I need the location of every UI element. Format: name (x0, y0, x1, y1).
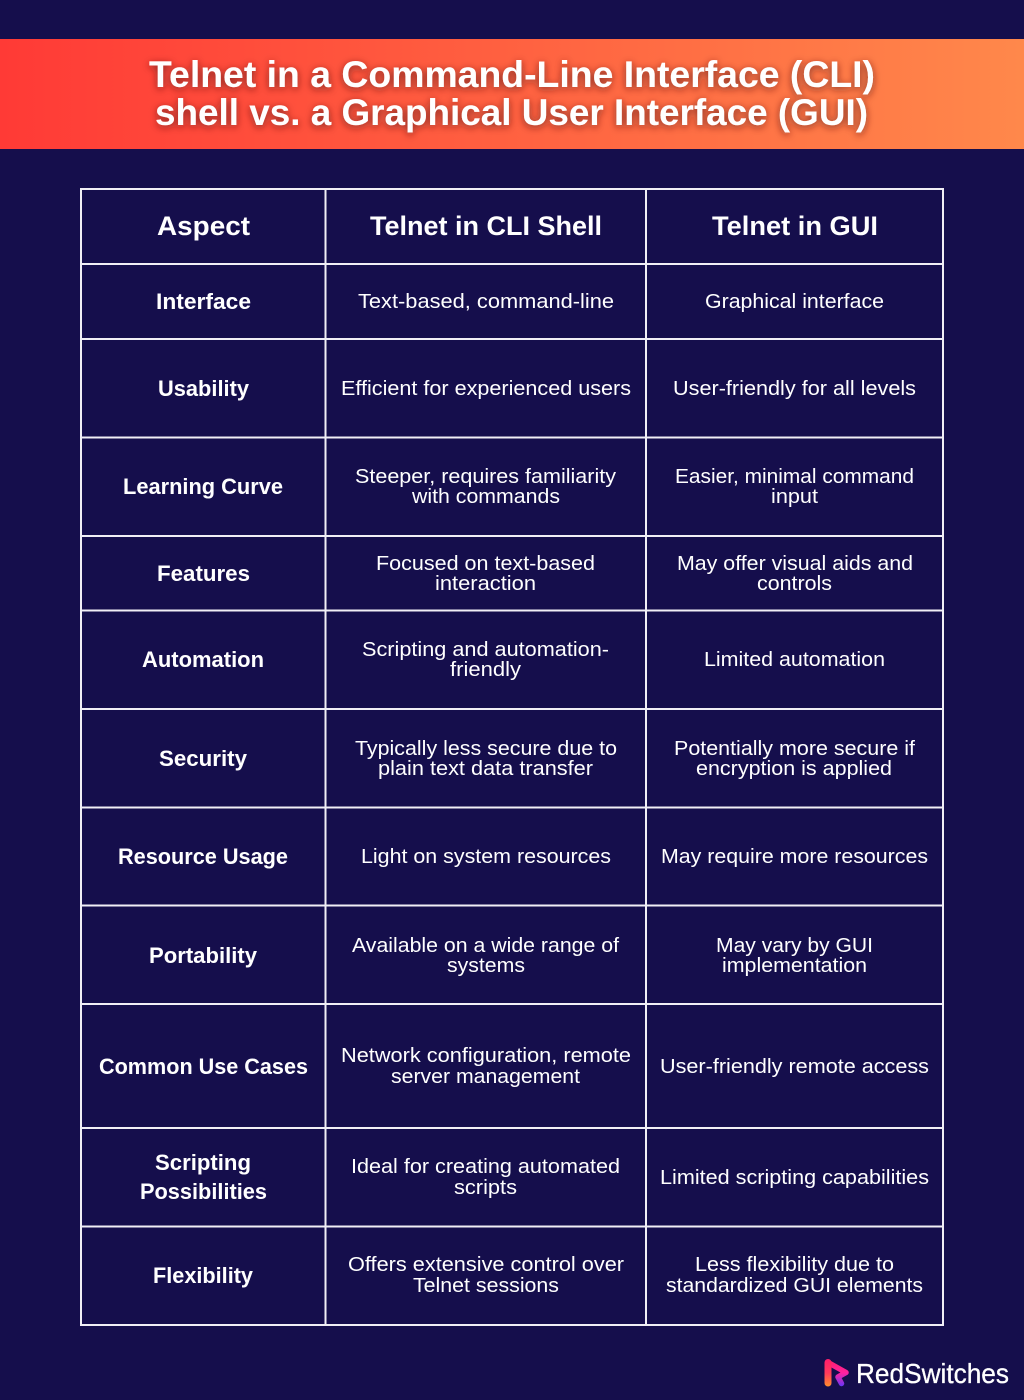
table header row (157, 211, 878, 241)
row: features: Focused on text-based (376, 552, 595, 575)
row: portability: May vary by GUI (716, 934, 873, 957)
row: features: Features (157, 561, 250, 586)
row: interface: Interface (156, 289, 251, 314)
row: automation: Scripting and automation- (362, 638, 609, 661)
row: usability: Efficient for experienced users (341, 377, 631, 400)
comparison table (81, 189, 943, 1325)
table header row: Aspect (157, 211, 250, 241)
row: common use cases: User-friendly remote access (660, 1055, 929, 1078)
row: resource usage: Resource Usage (118, 844, 288, 869)
row: features: interaction (435, 572, 536, 595)
row: security: encryption is applied (696, 757, 892, 780)
row: learning curve (123, 465, 914, 508)
row: usability (158, 376, 916, 401)
logo wordmark: RedSwitches (856, 1358, 1009, 1389)
table grid (81, 189, 943, 1325)
row: common use cases: Network configuration, remote (341, 1044, 631, 1067)
row: automation (142, 638, 885, 681)
row: automation: Limited automation (704, 648, 885, 671)
row: flexibility: Less flexibility due to (695, 1253, 894, 1276)
row: security: Security (159, 746, 248, 771)
row: features: May offer visual aids and (677, 552, 913, 575)
header banner (0, 39, 1024, 149)
row: common use cases: Common Use Cases (99, 1054, 308, 1079)
row: resource usage: Light on system resources (361, 845, 611, 868)
row: common use cases: server management (391, 1065, 580, 1088)
row: automation: Automation (142, 647, 264, 672)
row: learning curve: Steeper, requires familiarity (355, 465, 617, 488)
row: portability: Available on a wide range of (352, 934, 619, 957)
row: portability: Portability (149, 943, 258, 968)
title (149, 54, 875, 133)
row: scripting possibilities (140, 1150, 929, 1204)
row: flexibility: Telnet sessions (413, 1274, 559, 1297)
row: learning curve: Learning Curve (123, 474, 283, 499)
title: shell vs. a Graphical User Interface (GUI) (155, 92, 868, 133)
row: features (157, 552, 913, 595)
row: scripting possibilities: Ideal for creating automated (351, 1155, 620, 1178)
row: interface: Text-based, command-line (358, 290, 614, 313)
title: Telnet in a Command-Line Interface (CLI) (149, 54, 875, 95)
row: scripting possibilities: Scripting (155, 1150, 251, 1175)
row: common use cases (99, 1044, 929, 1088)
logo: RedSwitches (828, 1358, 1009, 1389)
row: features: controls (757, 572, 832, 595)
row: flexibility: standardized GUI elements (666, 1274, 923, 1297)
row: resource usage (118, 844, 928, 869)
icon: logo mark (828, 1362, 846, 1384)
row: interface: Graphical interface (705, 290, 884, 313)
row: scripting possibilities: Limited scripting capabilities (660, 1166, 929, 1189)
row: resource usage: May require more resources (661, 845, 928, 868)
row: portability: systems (447, 954, 525, 977)
row: usability: Usability (158, 376, 250, 401)
row: scripting possibilities: scripts (454, 1176, 517, 1199)
row: security: Potentially more secure if (674, 737, 915, 760)
row: portability: implementation (722, 954, 867, 977)
row: learning curve: input (771, 485, 818, 508)
row: automation: friendly (450, 658, 522, 681)
row: security: plain text data transfer (378, 757, 593, 780)
row: learning curve: Easier, minimal command (675, 465, 914, 488)
row: security (159, 737, 915, 780)
row: security: Typically less secure due to (355, 737, 617, 760)
table header row: Telnet in CLI Shell (370, 211, 602, 241)
row: flexibility: Offers extensive control over (348, 1253, 624, 1276)
row: flexibility (153, 1253, 923, 1297)
row: usability: User-friendly for all levels (673, 377, 916, 400)
row: scripting possibilities: Possibilities (140, 1179, 267, 1204)
row: flexibility: Flexibility (153, 1263, 254, 1288)
table header row: Telnet in GUI (712, 211, 878, 241)
row: learning curve: with commands (411, 485, 560, 508)
row: portability (149, 934, 873, 977)
row: interface (156, 289, 884, 314)
